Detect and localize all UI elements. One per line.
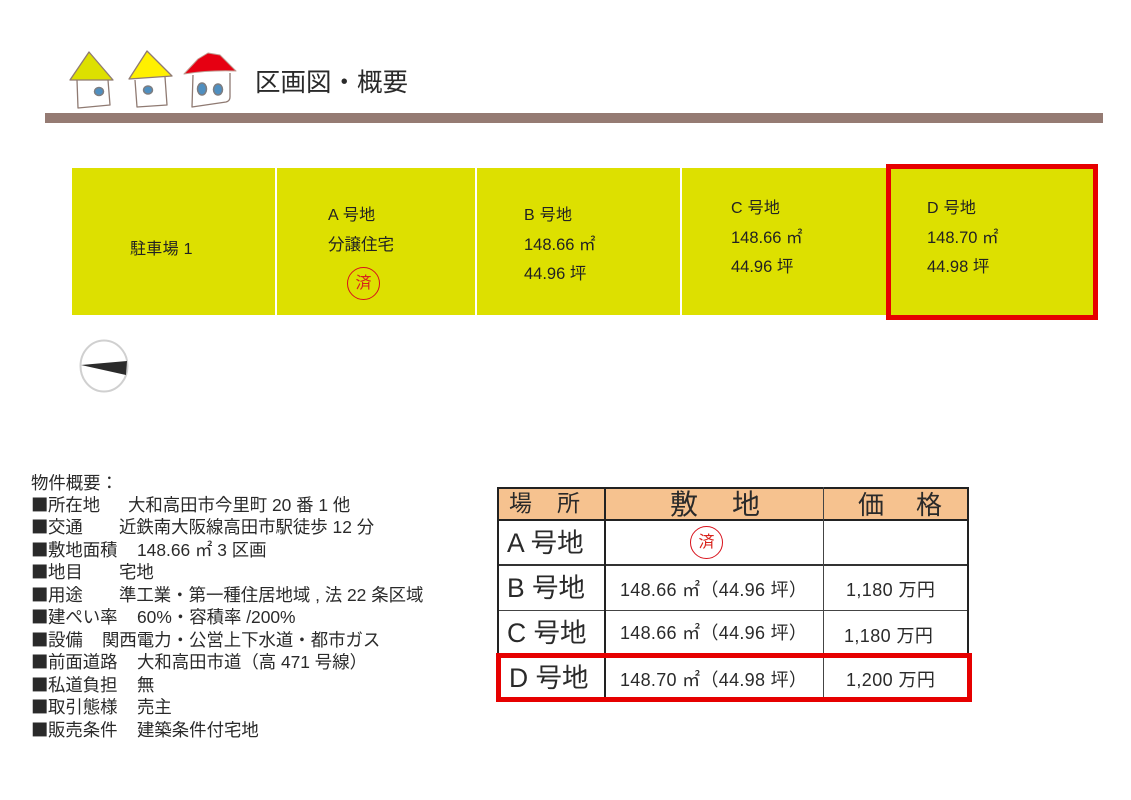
table: lot prices: 格 [916,490,942,520]
text block: property summary: 宅地 [119,562,154,582]
label: parking: 駐車場 1 [130,241,193,258]
label: lot B: 44.96 坪 [524,265,586,283]
text block: property summary: 売主 [137,697,172,717]
label: lot B: 148.66 ㎡ [524,236,596,254]
text block: property summary [31,473,423,742]
label: lot A: A 号地 [328,207,375,224]
table: lot prices: 148.66 ㎡（44.96 坪） [620,580,807,600]
icon: three hand-drawn houses [69,50,236,109]
text block: property summary: ■ [31,514,48,539]
lot: B [477,168,680,315]
table: lot prices: 価 [858,490,884,520]
text block: property summary: 地目 [48,562,83,582]
icon: sold stamp A: 済 [355,275,372,292]
text block: property summary: 販売条件 [48,720,118,740]
lot: parking [72,168,275,315]
label: lot C: 148.66 ㎡ [731,229,803,247]
text block: property summary: ■ [31,627,48,652]
header rule [45,113,1103,123]
text block: property summary: 敷地面積 [48,540,118,560]
text block: property summary: 近鉄南大阪線高田市駅徒歩 12 分 [119,517,374,537]
text block: property summary: 60%・容積率 /200% [137,607,296,627]
label: lot D [927,199,999,276]
label: lot C: 44.96 坪 [731,258,793,276]
label: lot D: 148.70 ㎡ [927,229,999,247]
label: lot C [731,199,803,276]
text block: property summary: 交通 [48,517,83,537]
text block: property summary: ■ [31,492,48,517]
text block: property summary: 設備 [48,630,83,650]
row B: B 号地 [507,573,585,603]
label: lot B: B 号地 [524,207,572,224]
text block: property summary: 関西電力・公営上下水道・都市ガス [102,630,380,650]
text block: property summary: 無 [137,675,154,695]
text block: property summary: 物件概要： [31,473,118,493]
text block: property summary: 用途 [48,585,83,605]
text block: property summary: 大和高田市道（高 471 号線） [137,652,367,672]
text block: property summary: ■ [31,537,48,562]
lot: D highlighted [886,164,1098,320]
text block: property summary: ■ [31,559,48,584]
table header fill [497,487,969,519]
row D: D 号地 [509,663,588,693]
label: lot C: C 号地 [731,200,780,217]
table: lot prices: 148.66 ㎡（44.96 坪） [620,623,807,643]
text block: property summary: ■ [31,604,48,629]
text block: property summary: ■ [31,694,48,719]
table: lot prices: 148.70 ㎡（44.98 坪） [620,670,807,690]
row C: C 号地 [507,618,586,648]
title: 区画図・概要 [255,69,408,97]
lot: C [682,168,888,315]
table: lot prices: 敷 [670,489,698,520]
icon: sold stamp in table: 済 [698,534,714,551]
icon: compass [80,340,128,392]
highlight: row D [496,653,972,702]
text block: property summary: 建ぺい率 [48,607,118,627]
label: lot B [524,206,596,283]
text block: property summary: 私道負担 [48,675,118,695]
label: lot A [328,206,394,300]
label: lot A: 分譲住宅 [328,236,394,254]
lot: A [277,168,475,315]
text block: property summary: ■ [31,672,48,697]
text block: property summary: 取引態様 [48,697,118,717]
text block: property summary: ■ [31,717,48,742]
text block: property summary: 建築条件付宅地 [137,720,259,740]
icon: sold stamp A [347,267,380,300]
text block: property summary: ■ [31,582,48,607]
icon: sold stamp in table [690,526,723,559]
table: lot prices: 地 [732,489,760,520]
text block: property summary: 大和高田市今里町 20 番 1 他 [128,495,350,515]
table: lot prices [497,487,969,697]
table: lot prices: 1,200 万円 [846,670,935,690]
text block: property summary: 148.66 ㎡ 3 区画 [137,540,267,560]
header labels: 場 [509,490,532,516]
table: lot prices: 1,180 万円 [846,580,935,600]
text block: property summary: 準工業・第一種住居地域 , 法 22 条区域 [119,585,423,605]
text block: property summary: 前面道路 [48,652,118,672]
table: lot prices: 1,180 万円 [844,626,933,646]
text block: property summary: ■ [31,649,48,674]
label: lot D: 44.98 坪 [927,258,989,276]
label: lot D: D 号地 [927,200,976,217]
text block: property summary: 所在地 [48,495,100,515]
row A: A 号地 [507,528,584,558]
table: lot prices: 所 [557,490,580,516]
